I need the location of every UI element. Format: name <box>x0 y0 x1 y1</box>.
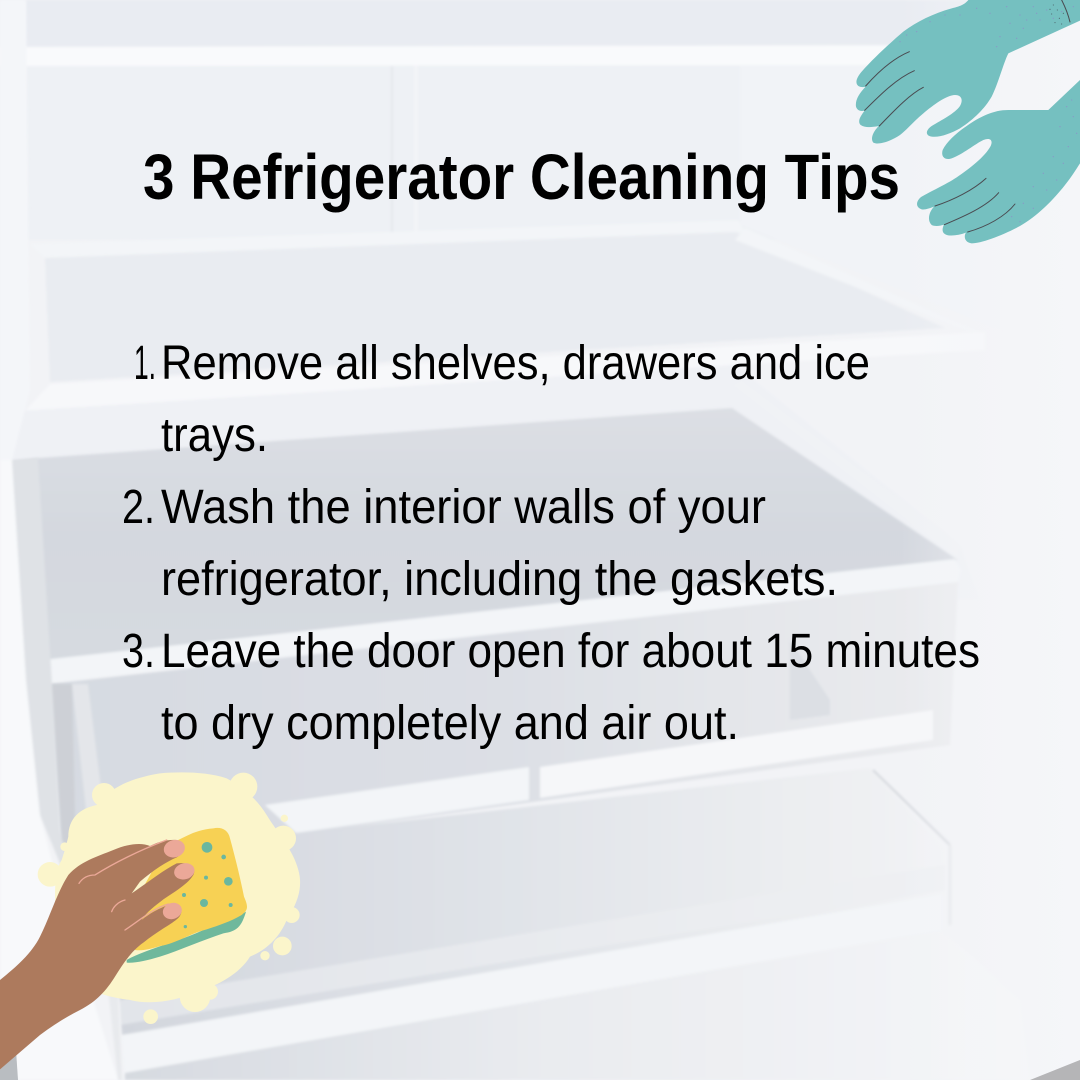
tip 2: 2. <box>122 481 155 534</box>
fingernails <box>161 838 196 922</box>
tip 2: refrigerator, including the gaskets. <box>161 553 838 606</box>
upper glove <box>856 0 1080 144</box>
sponge <box>127 828 247 963</box>
icon: teal gloved hands <box>856 0 1080 243</box>
tip 3: Leave the door open for about 15 minutes <box>161 625 980 678</box>
numbered list of cleaning tips <box>122 337 980 750</box>
tip 2: Wash the interior walls of your <box>161 481 766 534</box>
hand <box>0 838 196 1069</box>
lower glove <box>917 80 1080 243</box>
title: 3 Refrigerator Cleaning Tips <box>143 141 900 213</box>
tip 1: trays. <box>161 409 268 462</box>
tip 1: 1. <box>134 337 156 390</box>
tip 1: Remove all shelves, drawers and ice <box>161 337 870 390</box>
tip 2 <box>122 481 838 606</box>
soap foam <box>38 772 300 1024</box>
tip 3: to dry completely and air out. <box>161 697 739 750</box>
tip 3 <box>122 625 980 750</box>
tip 1 <box>134 337 870 462</box>
tip 3: 3. <box>122 625 155 678</box>
icon: hand scrubbing with sponge and foam <box>0 772 300 1069</box>
